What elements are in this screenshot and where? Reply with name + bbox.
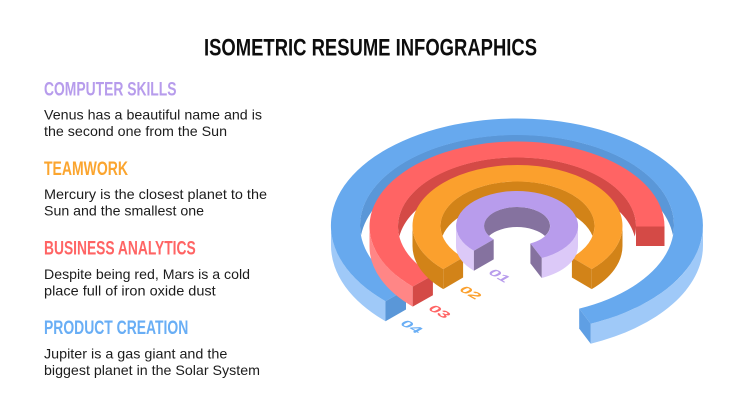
text block: computer skills (44, 106, 262, 139)
text block: product creation: biggest planet in the Solar System (44, 362, 260, 378)
label: 01: 01 (484, 268, 514, 285)
item: product creation (44, 318, 260, 378)
title: ISOMETRIC RESUME INFOGRAPHICS (204, 35, 537, 62)
chart: isometric concentric rings (331, 118, 703, 344)
text block: business analytics: place full of iron oxide dust (44, 282, 216, 298)
ring 02: orange (412, 165, 622, 289)
panel: text list (44, 79, 267, 378)
text block: product creation (44, 345, 260, 378)
item: computer skills (44, 79, 262, 139)
label: 03: 03 (424, 304, 454, 321)
text block: business analytics: Despite being red, Mars is a cold (44, 266, 250, 282)
ring 04: blue (331, 118, 703, 344)
text block: computer skills: the second one from the Sun (44, 123, 227, 139)
label: 02: 02 (455, 285, 485, 302)
heading: product creation: PRODUCT CREATION (44, 318, 188, 339)
text block: teamwork: Mercury is the closest planet to the (44, 186, 267, 202)
text block: computer skills: Venus has a beautiful name and is (44, 106, 262, 122)
ring 03: red (369, 141, 664, 307)
heading: computer skills: COMPUTER SKILLS (44, 79, 176, 100)
text block: product creation: Jupiter is a gas giant and the (44, 345, 228, 361)
text block: business analytics (44, 266, 250, 298)
label: 04: 04 (396, 319, 426, 336)
heading: teamwork: TEAMWORK (44, 159, 128, 180)
item: business analytics (44, 238, 250, 298)
ring 01: purple (456, 191, 578, 278)
text block: teamwork: Sun and the smallest one (44, 202, 204, 218)
text block: teamwork (44, 186, 267, 218)
heading: business analytics: BUSINESS ANALYTICS (44, 238, 196, 260)
item: teamwork (44, 159, 267, 218)
